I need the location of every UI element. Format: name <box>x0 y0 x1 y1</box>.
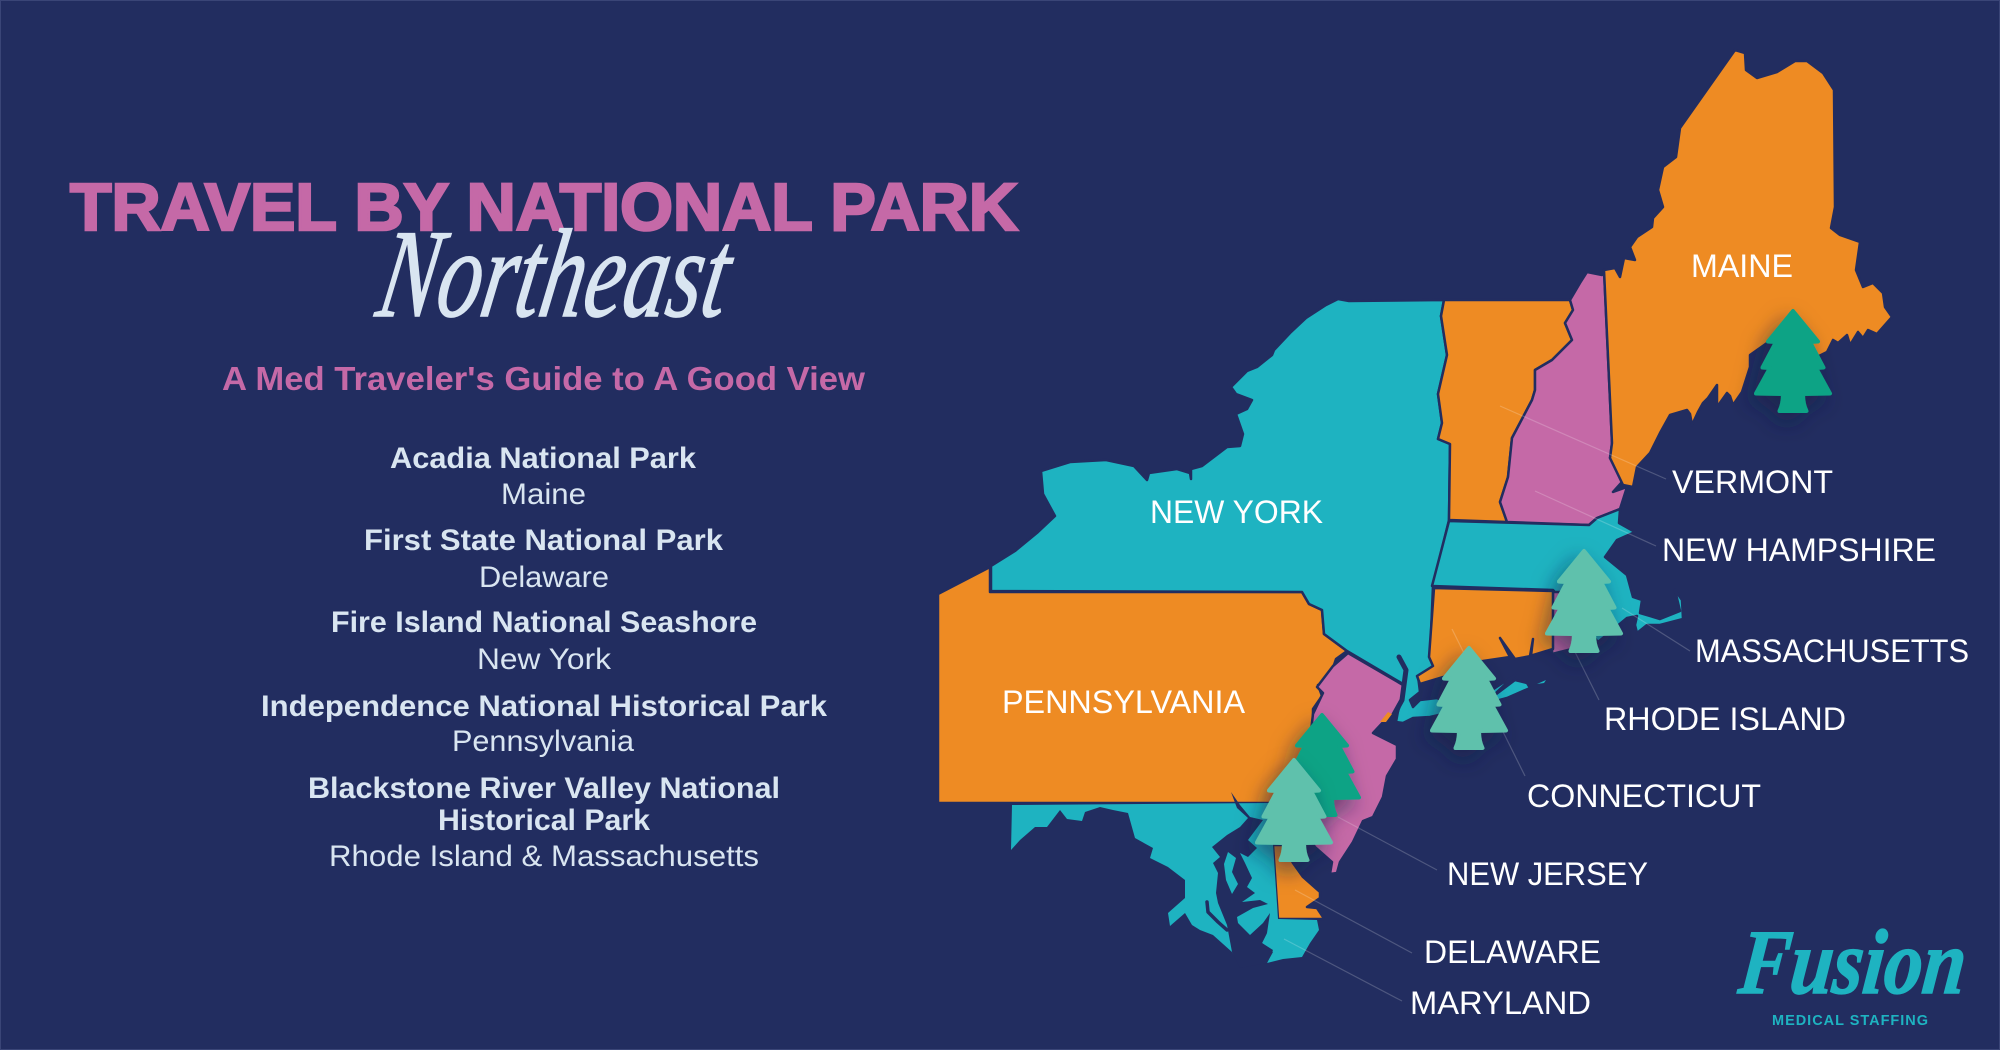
Patuxent River <box>1207 902 1227 930</box>
park: Fire Island <box>331 606 757 676</box>
state: New Hampshire <box>1500 270 1627 525</box>
park: First State: First State National Park <box>364 524 723 557</box>
park list <box>261 442 827 873</box>
Chesapeake Bay <box>1212 792 1273 968</box>
state: Delaware <box>1273 845 1323 919</box>
map labels: NEW JERSEY <box>1447 856 1648 892</box>
Bay islands <box>1224 852 1238 894</box>
state: Pennsylvania <box>938 567 1347 803</box>
logo: Fusion Medical Staffing: MEDICAL STAFFING <box>1772 1013 1928 1029</box>
map labels: MASSACHUSETTS <box>1695 633 1969 669</box>
state: Massachusetts <box>1432 509 1683 642</box>
park: Independence: Independence National Historical Park <box>261 690 827 723</box>
state: Vermont <box>1438 300 1573 522</box>
park: Blackstone River Valley: Blackstone River Valley National <box>308 772 780 805</box>
state: Connecticut <box>1417 588 1553 684</box>
park: Blackstone River Valley: Rhode Island & Massachusetts <box>329 840 759 873</box>
eastern Long Island tip <box>1537 680 1546 684</box>
park: First State: Delaware <box>479 561 609 594</box>
map of northeast states <box>938 50 1892 968</box>
state: Rhode Island <box>1552 592 1575 654</box>
icon: tree Blackstone River Valley <box>1547 551 1621 651</box>
park: Fire Island: Fire Island National Seashore <box>331 606 757 639</box>
park: Fire Island: New York <box>477 643 612 676</box>
state: Maryland <box>1011 803 1319 965</box>
icon: tree Independence <box>1257 760 1331 860</box>
map labels: CONNECTICUT <box>1527 778 1761 814</box>
Staten Island <box>1380 712 1392 722</box>
icon: tree Acadia <box>1756 311 1830 411</box>
script heading: Northeast <box>368 205 743 344</box>
state: Maine <box>1604 50 1892 487</box>
park: Acadia: Maine <box>501 478 586 511</box>
state: New York <box>991 299 1530 723</box>
park: Blackstone River Valley <box>308 772 780 873</box>
icon: tree Fire Island <box>1432 648 1506 748</box>
map labels: NEW HAMPSHIRE <box>1662 532 1936 568</box>
map labels: RHODE ISLAND <box>1604 701 1846 737</box>
map labels: NEW YORK <box>1150 494 1323 530</box>
state: New Jersey <box>1300 653 1403 874</box>
title: TRAVEL BY NATIONAL PARK <box>70 170 1018 245</box>
park: First State <box>364 524 723 594</box>
Hudson River <box>1392 657 1406 718</box>
leader lines connecting labels to states <box>1284 406 1690 1001</box>
map labels <box>1002 248 1969 1021</box>
park: Acadia: Acadia National Park <box>390 442 696 475</box>
map labels: MARYLAND <box>1410 985 1591 1021</box>
map labels: DELAWARE <box>1424 934 1601 970</box>
park: Acadia <box>390 442 696 511</box>
subtitle: A Med Traveler's Guide to A Good View <box>222 360 865 397</box>
map labels: MAINE <box>1691 248 1793 284</box>
park: Blackstone River Valley: Historical Park <box>438 804 650 837</box>
map labels: VERMONT <box>1672 464 1833 500</box>
icon: tree First State <box>1285 715 1359 815</box>
park: Independence: Pennsylvania <box>452 725 634 758</box>
map labels: PENNSYLVANIA <box>1002 684 1246 720</box>
park: Independence <box>261 690 827 758</box>
